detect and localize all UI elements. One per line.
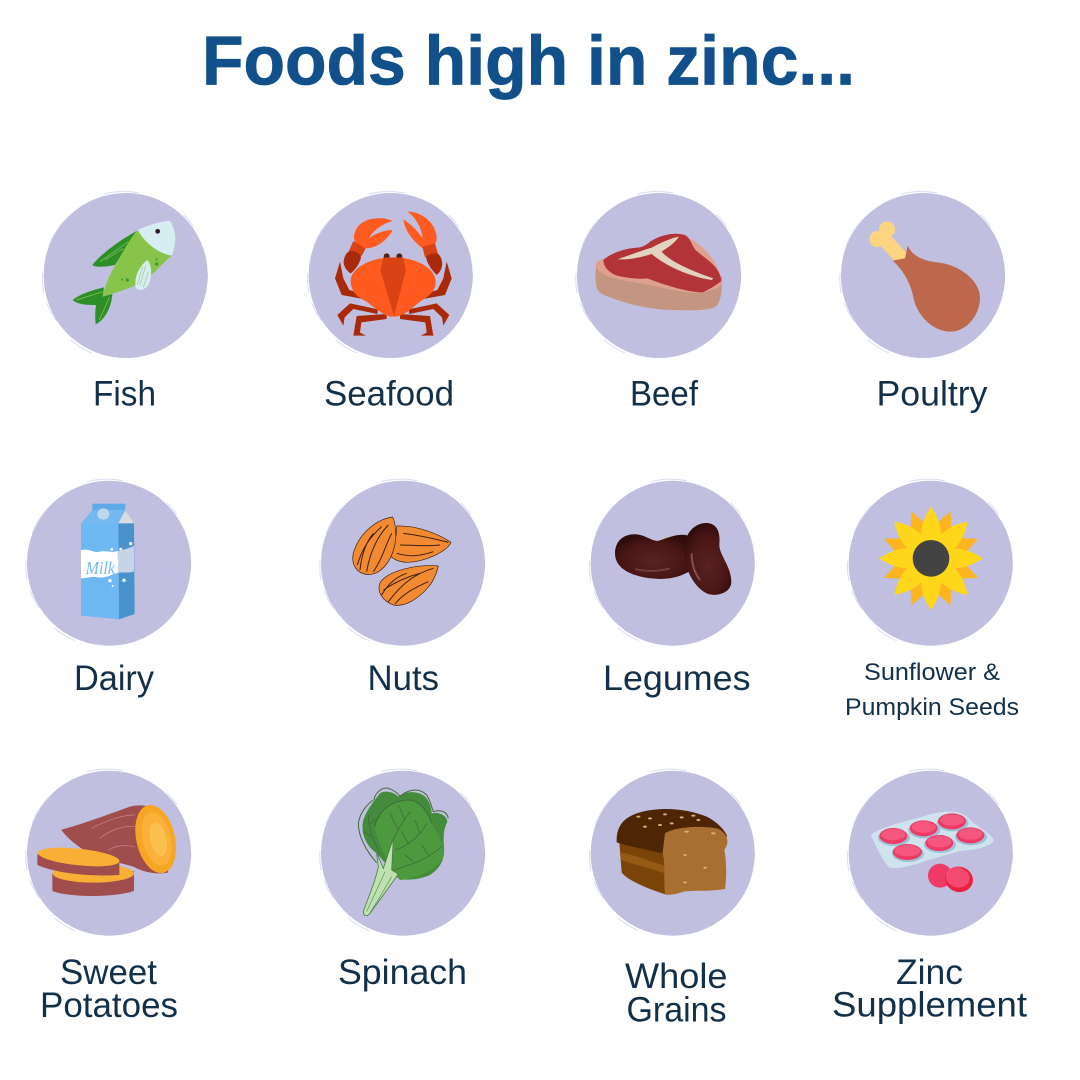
label: Sweet Potatoes: Sweet bbox=[60, 953, 157, 992]
label: Sweet Potatoes bbox=[40, 953, 178, 1025]
icon: crab bbox=[335, 212, 452, 336]
legumes background circle bbox=[589, 479, 755, 646]
icon: kidney beans bbox=[615, 523, 731, 595]
panel: whole grains bbox=[589, 769, 755, 1030]
panel: zinc supplement bbox=[832, 769, 1027, 1024]
icon: bread loaf bbox=[617, 809, 728, 895]
icon: milk carton bbox=[81, 504, 135, 619]
panel: dairy bbox=[26, 479, 191, 698]
nuts background circle bbox=[320, 479, 485, 646]
panel: legumes bbox=[589, 479, 755, 698]
sweet potatoes background circle bbox=[26, 769, 191, 936]
label: Sweet Potatoes: Potatoes bbox=[40, 986, 178, 1025]
spinach background circle bbox=[320, 769, 485, 936]
label: Legumes: Legumes bbox=[603, 659, 750, 698]
label: Whole Grains bbox=[625, 957, 728, 1030]
panel: fish bbox=[42, 191, 208, 414]
label: Sunflower & Pumpkin Seeds: Sunflower & bbox=[864, 659, 1000, 686]
fish background circle bbox=[42, 191, 208, 358]
panel: sweet potatoes bbox=[26, 769, 191, 1025]
panel: spinach bbox=[320, 769, 485, 992]
seeds background circle bbox=[847, 479, 1013, 646]
label: Poultry: Poultry bbox=[876, 374, 988, 414]
icon: fish bbox=[73, 221, 175, 324]
icon: milk carton: Milk bbox=[85, 558, 116, 578]
label: Sunflower & Pumpkin Seeds bbox=[845, 659, 1019, 721]
icon: sunflower bbox=[879, 507, 983, 610]
panel: beef bbox=[576, 191, 741, 414]
label: Seafood: Seafood bbox=[324, 374, 454, 414]
label: Sunflower & Pumpkin Seeds: Pumpkin Seeds bbox=[845, 694, 1019, 721]
label: Whole Grains: Grains bbox=[626, 990, 726, 1030]
panel: nuts bbox=[320, 479, 485, 698]
panel: seeds bbox=[845, 479, 1019, 721]
label: Zinc Supplement: Supplement bbox=[832, 986, 1027, 1024]
dairy background circle bbox=[26, 479, 191, 646]
panel: poultry bbox=[840, 191, 1005, 414]
icon: spinach bbox=[358, 788, 448, 916]
beef background circle bbox=[576, 191, 741, 358]
label: Fish: Fish bbox=[93, 374, 156, 414]
panel: seafood bbox=[307, 191, 473, 414]
label: Dairy: Dairy bbox=[74, 659, 154, 698]
icon: chicken leg bbox=[869, 221, 980, 332]
icon: steak bbox=[596, 234, 722, 310]
label: Zinc Supplement bbox=[832, 953, 1027, 1024]
label: Nuts: Nuts bbox=[368, 659, 439, 698]
icon: pills bbox=[871, 812, 994, 895]
seafood background circle bbox=[307, 191, 473, 358]
poultry background circle bbox=[840, 191, 1005, 358]
icon: sweet potato bbox=[37, 801, 182, 896]
zinc supplement background circle bbox=[847, 769, 1013, 936]
label: Spinach: Spinach bbox=[338, 953, 467, 992]
icon: almonds bbox=[353, 517, 451, 605]
label: Zinc Supplement: Zinc bbox=[896, 953, 963, 992]
whole grains background circle bbox=[589, 769, 755, 936]
title: Foods high in zinc... bbox=[202, 22, 855, 100]
label: Whole Grains: Whole bbox=[625, 957, 728, 996]
label: Beef: Beef bbox=[630, 374, 698, 414]
